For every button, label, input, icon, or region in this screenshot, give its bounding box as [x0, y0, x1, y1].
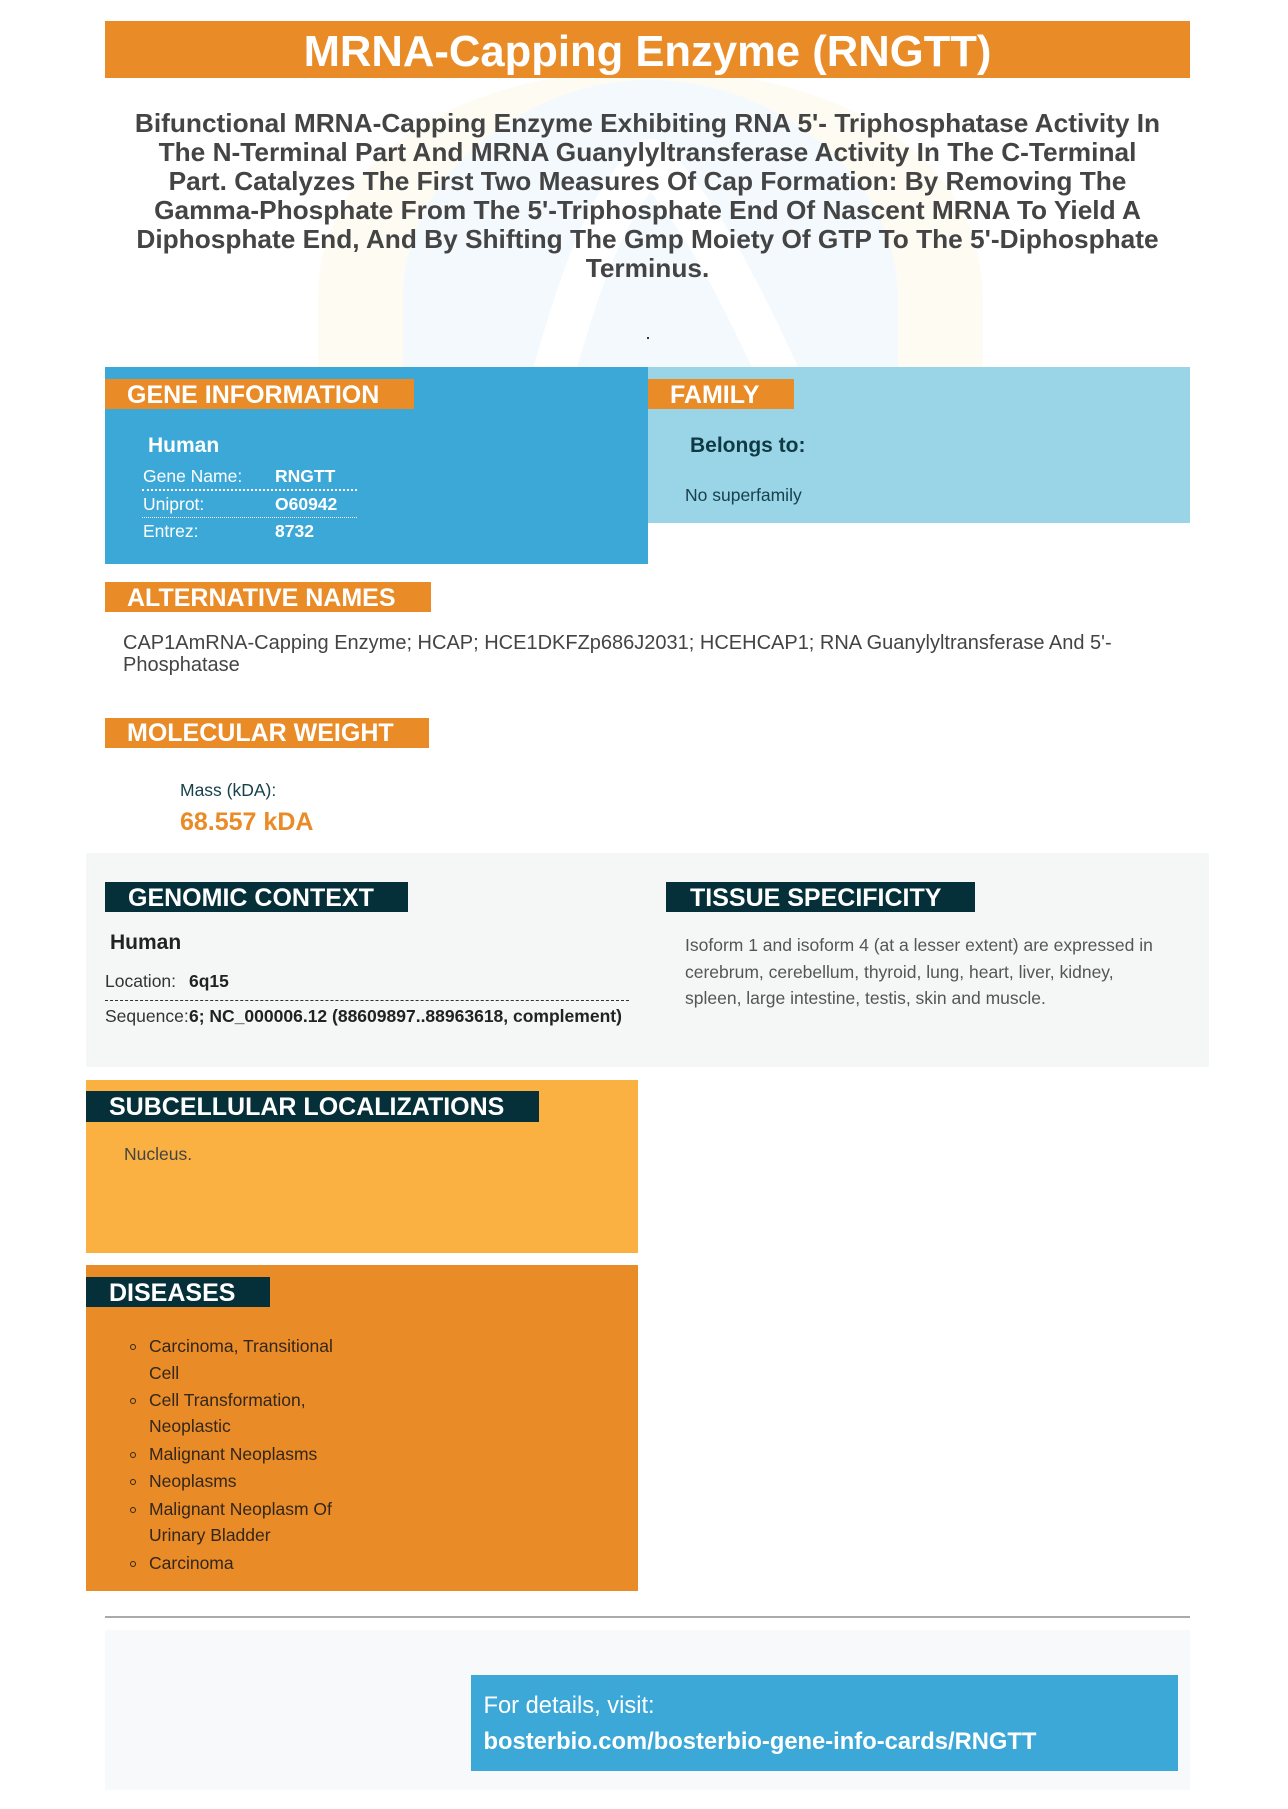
species label: Human [110, 931, 181, 954]
alternative names text: CAP1AmRNA-Capping Enzyme; HCAP; HCE1DKFZp686J2031; HCEHCAP1; RNA Guanylyltransferase And 5'- [123, 632, 1112, 654]
value: gene name: RNGTT [275, 466, 335, 486]
alternative names text [123, 632, 1112, 676]
localization text: Nucleus. [124, 1144, 192, 1164]
title banner [105, 21, 1190, 78]
item: cell transformation, neoplastic: Cell Transformation, [149, 1390, 306, 1410]
row: gene name: Gene Name: [143, 466, 242, 486]
callout url: bosterbio.com/bosterbio-gene-info-cards/RNGTT [484, 1728, 1036, 1755]
bullet [130, 1452, 136, 1458]
item: malignant neoplasms: Malignant Neoplasms [149, 1444, 317, 1464]
watermark: faint background logo [318, 78, 983, 367]
description text [135, 108, 1160, 283]
item: carcinoma, transitional cell: Carcinoma, Transitional [149, 1336, 333, 1356]
heading: genomic context: GENOMIC CONTEXT [128, 884, 374, 912]
description text: Part. Catalyzes The First Two Measures Of Cap Formation: By Removing The [169, 166, 1126, 196]
row: entrez: Entrez: [143, 521, 198, 541]
description text: Terminus. [586, 253, 709, 283]
tissue specificity text: spleen, large intestine, testis, skin and muscle. [685, 988, 1046, 1008]
callout: details link [471, 1675, 1178, 1771]
tissue specificity text: Isoform 1 and isoform 4 (at a lesser extent) are expressed in [685, 935, 1153, 955]
species label: Human [148, 434, 219, 457]
heading: gene information: GENE INFORMATION [127, 381, 379, 409]
heading: diseases: DISEASES [109, 1279, 235, 1307]
alternative names text: Phosphatase [123, 654, 240, 676]
row: uniprot: Uniprot: [143, 494, 204, 514]
heading: alternative names: ALTERNATIVE NAMES [127, 584, 396, 612]
bullet [130, 1561, 136, 1567]
sequence value: 6; NC_000006.12 (88609897..88963618, complement) [189, 1006, 622, 1026]
item continuation: Urinary Bladder [149, 1525, 271, 1545]
gene info table [142, 466, 357, 541]
heading: subcellular localizations: SUBCELLULAR LOCALIZATIONS [109, 1093, 504, 1121]
panel: footer [105, 1630, 1190, 1790]
panel: genomic context and tissue specificity [86, 853, 1209, 1067]
heading: diseases [86, 1277, 270, 1307]
description text: The N-Terminal Part And MRNA Guanylyltransferase Activity In The C-Terminal [159, 137, 1136, 167]
family value: No superfamily [685, 485, 802, 505]
disease list [130, 1336, 333, 1573]
location value: 6q15 [189, 971, 229, 991]
heading: molecular weight: MOLECULAR WEIGHT [127, 719, 394, 747]
small dot mark [647, 337, 649, 339]
family subheading: Belongs to: [690, 434, 806, 457]
title banner: MRNA-Capping Enzyme (RNGTT) [304, 28, 991, 76]
panel: diseases [86, 1265, 638, 1591]
description text: Diphosphate End, And By Shifting The Gmp Moiety Of GTP To The 5'-Diphosphate [136, 224, 1159, 254]
panel: family [648, 367, 1190, 523]
bullet [130, 1398, 136, 1404]
item: malignant neoplasm of urinary bladder: Malignant Neoplasm Of [149, 1499, 332, 1519]
callout label: For details, visit: [484, 1693, 655, 1719]
bullet [130, 1479, 136, 1485]
tissue specificity text [685, 935, 1153, 1008]
heading: tissue specificity: TISSUE SPECIFICITY [690, 884, 941, 912]
item: neoplasms: Neoplasms [149, 1471, 237, 1491]
sequence row: Sequence: [105, 1006, 189, 1026]
heading: family: FAMILY [670, 381, 759, 409]
item continuation: Neoplastic [149, 1416, 231, 1436]
bullet [130, 1507, 136, 1513]
bullet [130, 1344, 136, 1350]
value: uniprot: O60942 [275, 494, 337, 514]
value: entrez: 8732 [275, 521, 314, 541]
heading: family [648, 379, 794, 409]
mass label: Mass (kDA): [180, 780, 276, 800]
mass value: 68.557 kDA [180, 808, 313, 836]
panel: subcellular localizations [86, 1080, 638, 1253]
location row: Location: [105, 971, 176, 991]
item continuation: Cell [149, 1363, 179, 1383]
description text: Bifunctional MRNA-Capping Enzyme Exhibiting RNA 5'- Triphosphatase Activity In [135, 108, 1160, 138]
description text: Gamma-Phosphate From The 5'-Triphosphate End Of Nascent MRNA To Yield A [154, 195, 1141, 225]
item: carcinoma: Carcinoma [149, 1553, 234, 1573]
panel: gene information [105, 367, 648, 564]
tissue specificity text: cerebrum, cerebellum, thyroid, lung, heart, liver, kidney, [685, 962, 1114, 982]
